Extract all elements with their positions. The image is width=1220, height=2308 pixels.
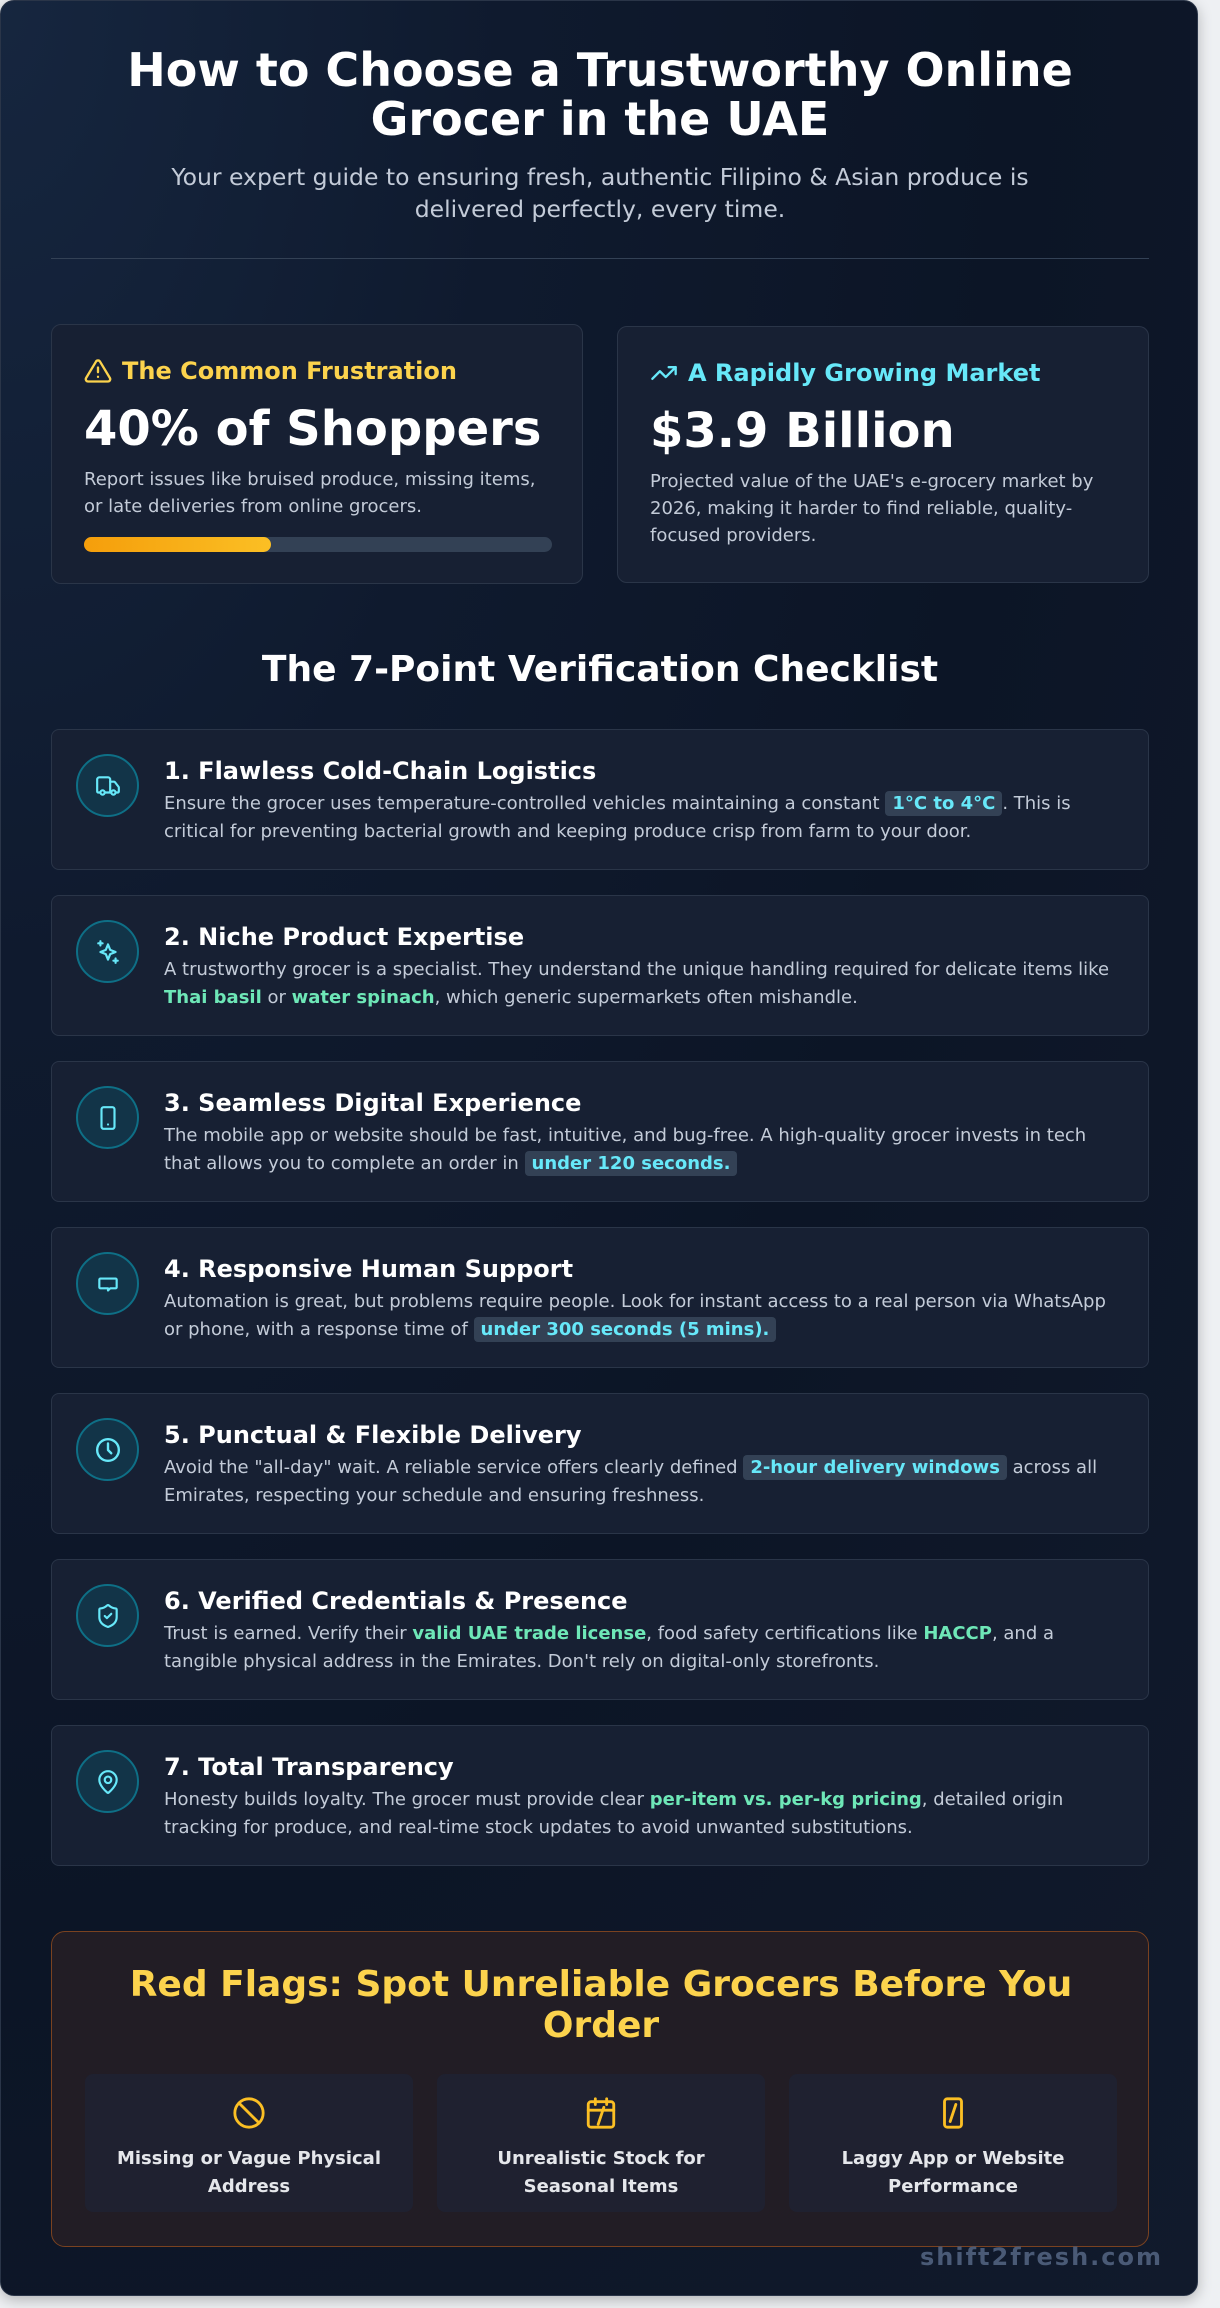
item 3 [51,1061,1149,1202]
item 3: The mobile app or website should be fast, intuitive, and bug-free. A high-quality grocer invests in tech that allows you to complete an order in under 120 seconds. [164,1125,1086,1174]
item 7: Honesty builds loyalty. The grocer must provide clear per-item vs. per-kg pricing, detailed origin tracking for produce, and real-time stock updates to avoid unwanted substitutions. [164,1789,1063,1838]
watermark: shift2fresh.com [920,2243,1163,2271]
subtitle: delivered perfectly, every time. [415,195,785,223]
icon: phone [76,1086,139,1149]
icon: truck [76,754,139,817]
subtitle: Your expert guide to ensuring fresh, authentic Filipino & Asian produce is [171,163,1029,191]
icon: map pin [76,1750,139,1813]
flag: missing address: Address [208,2176,290,2197]
flag: missing address: Missing or Vague Physical [117,2148,381,2169]
progress bar [84,537,552,552]
flag: laggy app: Laggy App or Website [842,2148,1064,2169]
description: Projected value of the UAE's e-grocery market by 2026, making it harder to find reliable, quality-focused providers. [650,471,1093,546]
item 6: 6. Verified Credentials & Presence [164,1587,628,1615]
stat card: common frustration [51,324,583,584]
flag: unrealistic stock [437,2074,765,2212]
flag: missing address [85,2074,413,2212]
label: market: A Rapidly Growing Market [688,359,1040,387]
item 1 [51,729,1149,870]
flag: laggy app [789,2074,1117,2212]
item 1: Ensure the grocer uses temperature-controlled vehicles maintaining a constant 1°C to 4°C . This is critical for preventing bacterial growth and keeping produce crisp from farm to your door. [164,793,1071,842]
item 2: A trustworthy grocer is a specialist. They understand the unique handling required for delicate items like Thai basil or water spinach, which generic supermarkets often mishandle. [164,959,1109,1008]
item 4: Automation is great, but problems require people. Look for instant access to a real person via WhatsApp or phone, with a response time of under 300 seconds (5 mins). [164,1291,1106,1340]
item 2 [51,895,1149,1036]
item 2: 2. Niche Product Expertise [164,923,524,951]
title [127,43,1073,146]
stat card: growing market [617,326,1149,583]
checklist heading: The 7-Point Verification Checklist [262,649,938,690]
item 4 [51,1227,1149,1368]
icon: sparkles [76,920,139,983]
flag: unrealistic stock: Seasonal Items [524,2176,678,2197]
title: Grocer in the UAE [371,92,829,146]
icon: shield [76,1584,139,1647]
item 5: 5. Punctual & Flexible Delivery [164,1421,581,1449]
description: Report issues like bruised produce, missing items, or late deliveries from online grocers. [84,469,535,517]
item 6 [51,1559,1149,1700]
flag: laggy app: Performance [888,2176,1018,2197]
item 3: 3. Seamless Digital Experience [164,1089,581,1117]
title: How to Choose a Trustworthy Online [127,43,1073,97]
item 5 [51,1393,1149,1534]
flag: unrealistic stock: Unrealistic Stock for [497,2148,705,2169]
item 1: 1. Flawless Cold-Chain Logistics [164,757,596,785]
item 5: Avoid the "all-day" wait. A reliable service offers clearly defined 2-hour delivery windows across all Emirates, respecting your schedule and ensuring freshness. [164,1457,1097,1506]
subtitle [171,163,1029,223]
red flags heading: Red Flags: Spot Unreliable Grocers Before You Order [130,1964,1072,2046]
label: frustration: The Common Frustration [122,357,457,385]
icon: clock [76,1418,139,1481]
icon: chat [76,1252,139,1315]
item 6: Trust is earned. Verify their valid UAE trade license, food safety certifications like HACCP, and a tangible physical address in the Emirates. Don't rely on digital-only storefronts. [164,1623,1054,1672]
panel: red flags [51,1931,1149,2247]
item 7 [51,1725,1149,1866]
item 7: 7. Total Transparency [164,1753,454,1781]
stat: 40%: 40% of Shoppers [84,401,541,457]
item 4: 4. Responsive Human Support [164,1255,573,1283]
stat: $3.9B: $3.9 Billion [650,403,955,459]
